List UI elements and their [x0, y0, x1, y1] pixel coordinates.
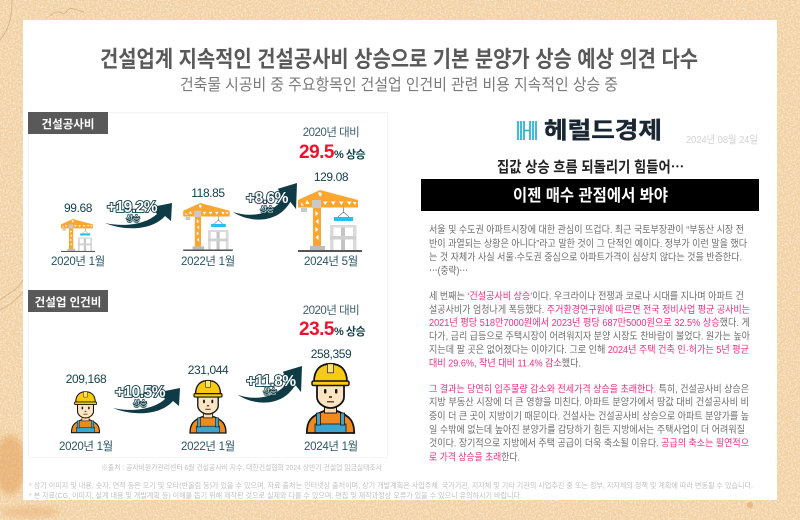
icon: small worker 2020 — [71, 392, 100, 433]
heading: construction cost — [28, 112, 108, 134]
footnotes — [29, 480, 753, 500]
callout: 29.5% rise — [299, 126, 365, 163]
article paragraph 2: 설공사비가 엄청나게 폭등했다. 주거환경연구원에 따르면 전국 정비사업 평균 공사비는 — [429, 303, 750, 316]
arrow: +19.2% — [105, 199, 172, 228]
value: 99.68: 99.68 — [64, 201, 93, 215]
arrow: +10.5% — [113, 384, 180, 413]
article paragraph 2: 2021년 평당 518만7000원에서 2023년 평당 687만5000원으로 32.5% 상승했다. 게 — [429, 316, 750, 329]
headline: 집값 상승 흐름 되돌리기 힘들어… — [497, 156, 684, 177]
date: 2024년 08월 24일 — [686, 133, 758, 146]
arrow: +11.8%: +11.8% — [246, 373, 296, 390]
arrow: +11.8%: 상승 — [263, 386, 277, 396]
value: 258,359: 258,359 — [311, 347, 352, 361]
label: January 2022: 2022년 1월 — [181, 255, 235, 268]
callout: 23.5% rise: 2020년 대비 — [303, 304, 359, 317]
icon: medium crane 2022 — [183, 203, 233, 251]
footnotes: * 상기 이미지 및 내용, 숫자, 면적 등은 오기 및 오타(반올림 등)가 있을 수 있으며, 자료 출처는 인터넷상 출처이며, 상기 개발계획은 사업주체, 국가기관, 지자체 및 기타 기관의 사업추진 중 또는 정부, 지자체의 정책 및 계획에 따라 변동될 수 있습니다. — [29, 480, 753, 490]
headline banner — [421, 179, 759, 211]
label: January 2020: 2020년 1월 — [51, 255, 105, 268]
icon: large crane 2024 — [298, 190, 362, 252]
article paragraph 2: 다가, 금리 급등으로 주택시장이 어려워지자 분양 시장도 찬바람이 불었다. 원가는 높아 — [429, 330, 750, 342]
article paragraph 1: …(중략)… — [429, 262, 468, 277]
callout: 29.5% rise: 29.5% 상승 — [299, 142, 365, 163]
article paragraph 1 — [429, 224, 747, 277]
article paragraph 1: 서울 및 수도권 아파트시장에 대한 관심이 뜨겁다. 최근 국토부장관이 “부동산 시장 전 — [429, 224, 744, 236]
article paragraph 2: 세 번째는 ‘건설공사비 상승’이다. 우크라이나 전쟁과 코로나 시대를 지나며 아파트 건 — [429, 290, 744, 302]
heading: labour cost — [28, 290, 108, 312]
arrow: +19.2%: +19.2% — [107, 199, 158, 216]
arrow: +8.6% — [233, 183, 297, 220]
value: 118.85: 118.85 — [191, 186, 225, 200]
arrow: +8.6%: 상승 — [260, 204, 274, 214]
article paragraph 3 — [429, 382, 749, 464]
label: January 2020: 2020년 1월 — [59, 440, 113, 453]
article paragraph 3: 중이 더 큰 곳이 지방이기 때문이다. 건설사는 건설공사비 상승으로 아파트 분양가를 높 — [429, 410, 749, 422]
value: 129.08: 129.08 — [314, 170, 349, 184]
article paragraph 2 — [429, 290, 750, 370]
callout: 23.5% rise: 23.5% 상승 — [299, 319, 365, 340]
heading: labour cost: 건설업 인건비 — [35, 295, 101, 309]
value: 231,044: 231,044 — [188, 363, 229, 377]
panel: construction cost — [28, 112, 388, 280]
article paragraph 3: 로 가격 상승을 초래한다. — [429, 450, 520, 464]
title: 건설업계 지속적인 건설공사비 상승으로 기본 분양가 상승 예상 의견 다수 — [100, 47, 698, 72]
icon: small crane 2020 — [61, 219, 95, 252]
article paragraph 2: 지는데 팔 곳은 없어졌다는 이야기다. 그로 인해 2024년 주택 건축 인·허가는 5년 평균 — [429, 343, 749, 356]
article paragraph 3: 지방 부동산 시장에 더 큰 영향을 미친다. 아파트 분양가에서 땅값 대비 건설공사비 비 — [429, 396, 749, 408]
label: January 2022: 2022년 1월 — [181, 440, 235, 453]
panel: construction labour cost — [28, 280, 388, 458]
headline banner: 이젠 매수 관점에서 봐야 — [513, 186, 668, 205]
callout: 29.5% rise: 2020년 대비 — [303, 126, 359, 139]
callout: 23.5% rise — [299, 304, 365, 340]
article paragraph 1: 는 것 자체가 사실 서울·수도권 중심으로 아파트가격이 심상치 않다는 것을 반증한다. — [429, 250, 742, 264]
arrow: +10.5%: 상승 — [133, 398, 147, 408]
article paragraph 3: 것이다. 장기적으로 지방에서 주택 공급이 더욱 축소될 이유다. 공급의 축소는 필연적으 — [429, 438, 749, 450]
subtitle: 건축물 시공비 중 주요항목인 건설업 인건비 관련 비용 지속적인 상승 중 — [180, 76, 618, 94]
article paragraph 3: 일 수밖에 없는데 높아진 분양가를 감당하기 힘든 지방에서는 주택사업이 더 어려워질 — [429, 423, 745, 436]
icon: large worker 2024 — [307, 364, 354, 433]
heading: construction cost: 건설공사비 — [42, 117, 94, 131]
arrow: +19.2%: 상승 — [126, 213, 140, 223]
footnotes: * 본 자료(CG, 이미지, 설계 내용 및 개발계획 등) 이해를 돕기 위해 제작된 것으로 실제와 다를 수 있으며, 편집 및 제작과정상 오류가 있을 수 있으니 유의하시기 바랍니다. — [29, 490, 522, 500]
logo: Herald Business: 헤럴드경제 — [544, 117, 662, 143]
article paragraph 3: 그 결과는 당연히 입주물량 감소와 전세가격 상승을 초래한다. 특히, 건설공사비 상승은 — [429, 382, 749, 396]
arrow: +10.5%: +10.5% — [115, 384, 166, 401]
article paragraph 2: 대비 29.6%, 작년 대비 11.4% 감소했다. — [429, 356, 581, 370]
label: May 2024: 2024년 5월 — [304, 255, 358, 268]
arrow: +11.8% — [238, 366, 302, 403]
source note: ※출처 : 공사비원가관리센터 6월 건설공사비 지수, 대한건설협회 2024 상반기 건설업 임금실태조사 — [101, 462, 382, 472]
icon: medium worker 2022 — [190, 381, 226, 433]
value: 209,168: 209,168 — [66, 372, 107, 386]
arrow: +8.6%: +8.6% — [246, 190, 289, 207]
label: January 2024: 2024년 1월 — [304, 440, 358, 453]
article paragraph 1: 반이 과열되는 상황은 아니다”라고 말한 것이 그 단적인 예이다. 정부가 이런 말을 했다 — [429, 237, 747, 250]
